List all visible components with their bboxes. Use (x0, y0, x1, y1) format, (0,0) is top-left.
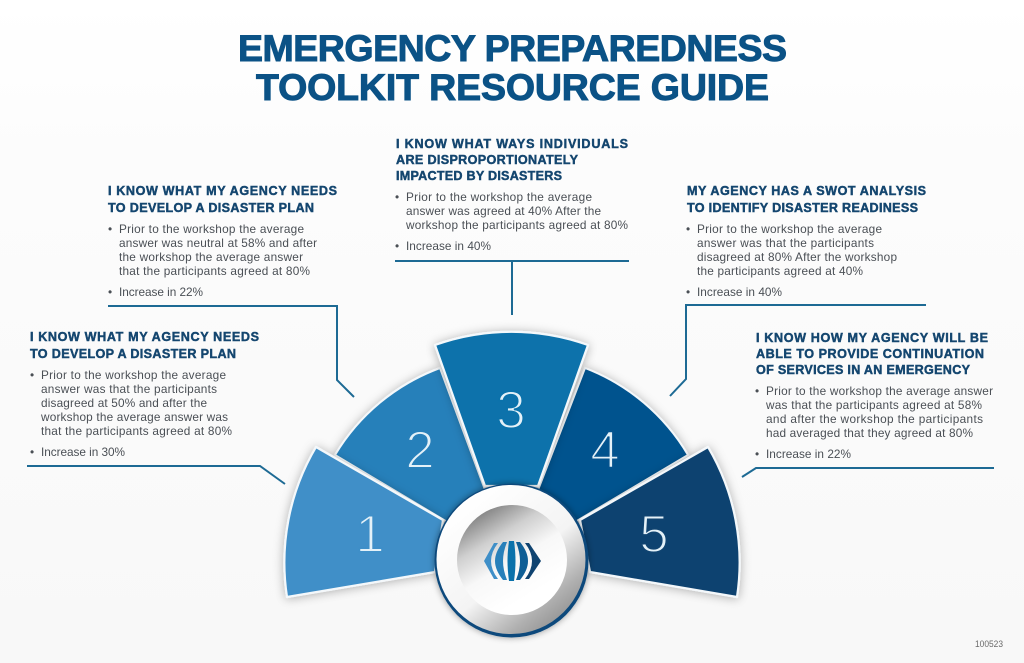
text block: item 2 bullets (108, 222, 317, 299)
text block: item 4 bullets (686, 222, 897, 299)
text block: item 5 bullets: and after the workshop the participants (766, 412, 983, 426)
text block: item 4 bullets: Increase in 40% (697, 285, 782, 299)
text block: item 3 bullets: answer was agreed at 40% After the (406, 204, 601, 218)
title: EMERGENCY PREPAREDNESS (238, 27, 787, 69)
text block: item 2 bullets: the workshop the average answer (119, 250, 303, 264)
heading: item 3: ARE DISPROPORTIONATELY (396, 153, 579, 167)
text block: item 2 bullets: that the participants agreed at 80% (119, 264, 310, 278)
segment 4 (511, 368, 688, 560)
segment 5 (580, 447, 740, 597)
text block: item 4 bullets: • (686, 285, 690, 299)
text block: item 1 bullets: Prior to the workshop the average (41, 368, 226, 382)
center medallion (434, 484, 588, 638)
panel: item 2 text (108, 184, 354, 397)
heading: item 3 (396, 137, 628, 183)
text block: item 3 bullets: workshop the participants agreed at 80% (405, 218, 628, 232)
text block: item 1 bullets: • (30, 445, 34, 459)
segment 3 (435, 332, 588, 486)
heading: item 4: MY AGENCY HAS A SWOT ANALYSIS (687, 184, 926, 198)
text block: item 5 bullets (755, 384, 993, 461)
text block: item 2 bullets: Increase in 22% (119, 285, 204, 299)
segment 1 (284, 447, 443, 597)
text block: item 3 bullets: • (395, 190, 399, 204)
connector: item 3 (395, 261, 629, 315)
text block: item 2 bullets: • (108, 222, 112, 236)
text block: item 3 bullets: • (395, 239, 399, 253)
segment 1: 1 (355, 505, 385, 564)
heading: item 3: IMPACTED BY DISASTERS (396, 169, 562, 183)
text block: item 4 bullets: Prior to the workshop the average (697, 222, 882, 236)
text block: item 1 bullets: disagreed at 50% and after the (41, 396, 207, 410)
heading: item 4 (687, 184, 926, 215)
text block: item 1 bullets (30, 368, 232, 459)
text block: item 5 bullets: had averaged that they agreed at 80% (766, 426, 974, 440)
heading: item 4: TO IDENTIFY DISASTER READINESS (687, 201, 918, 215)
text block: item 4 bullets: • (686, 222, 690, 236)
heading: item 5: I KNOW HOW MY AGENCY WILL BE (756, 331, 988, 345)
panel: item 4 text (670, 184, 926, 396)
text block: item 2 bullets: • (108, 285, 112, 299)
text block: item 1 bullets: • (30, 368, 34, 382)
connector: item 2 (108, 306, 354, 397)
heading: item 5: ABLE TO PROVIDE CONTINUATION (756, 347, 984, 361)
footer code: 100523 (975, 639, 1003, 650)
text block: item 5 bullets: Prior to the workshop the average answer (766, 384, 993, 398)
text block: item 5 bullets: Increase in 22% (766, 447, 852, 461)
segment 5: 5 (639, 505, 669, 564)
heading: item 2: TO DEVELOP A DISASTER PLAN (108, 201, 314, 215)
heading: item 5 (756, 331, 988, 377)
text block: item 1 bullets: that the participants agreed at 80% (41, 424, 232, 438)
text block: item 3 bullets (395, 190, 628, 253)
panel: item 3 text (395, 137, 629, 315)
connector: item 1 (27, 466, 285, 484)
text block: item 5 bullets: was that the participants agreed at 58% (765, 398, 982, 412)
panel: item 1 text (27, 330, 285, 484)
heading: item 3: I KNOW WHAT WAYS INDIVIDUALS (396, 137, 628, 151)
heading: item 1 (30, 330, 259, 361)
title: TOOLKIT RESOURCE GUIDE (256, 66, 769, 108)
title (238, 27, 787, 108)
segment 3: 3 (496, 381, 526, 440)
chart: five-segment fan (284, 332, 740, 638)
segment 2: 2 (405, 421, 435, 480)
text block: item 1 bullets: workshop the average answer was (40, 410, 228, 424)
heading: item 5: OF SERVICES IN AN EMERGENCY (756, 363, 971, 377)
icon: logo mark (484, 541, 541, 581)
connector: item 4 (670, 305, 926, 396)
text block: item 2 bullets: Prior to the workshop the average (119, 222, 304, 236)
panel: item 5 text (742, 331, 994, 477)
connector: item 5 (742, 468, 994, 477)
text block: item 5 bullets: • (755, 447, 759, 461)
text block: item 4 bullets: the participants agreed at 40% (697, 264, 864, 278)
text block: item 4 bullets: disagreed at 80% After the workshop (697, 250, 897, 264)
heading: item 2: I KNOW WHAT MY AGENCY NEEDS (108, 184, 337, 198)
text block: item 3 bullets: Increase in 40% (406, 239, 492, 253)
segment 4: 4 (590, 421, 620, 480)
text block: item 2 bullets: answer was neutral at 58% and after (119, 236, 317, 250)
heading: item 1: TO DEVELOP A DISASTER PLAN (30, 347, 236, 361)
segment 2 (335, 368, 511, 560)
heading: item 2 (108, 184, 337, 215)
text block: item 1 bullets: Increase in 30% (41, 445, 126, 459)
text block: item 5 bullets: • (755, 384, 759, 398)
heading: item 1: I KNOW WHAT MY AGENCY NEEDS (30, 330, 259, 344)
text block: item 1 bullets: answer was that the participants (41, 382, 217, 396)
text block: item 3 bullets: Prior to the workshop the average (406, 190, 592, 204)
text block: item 4 bullets: answer was that the participants (697, 236, 874, 250)
